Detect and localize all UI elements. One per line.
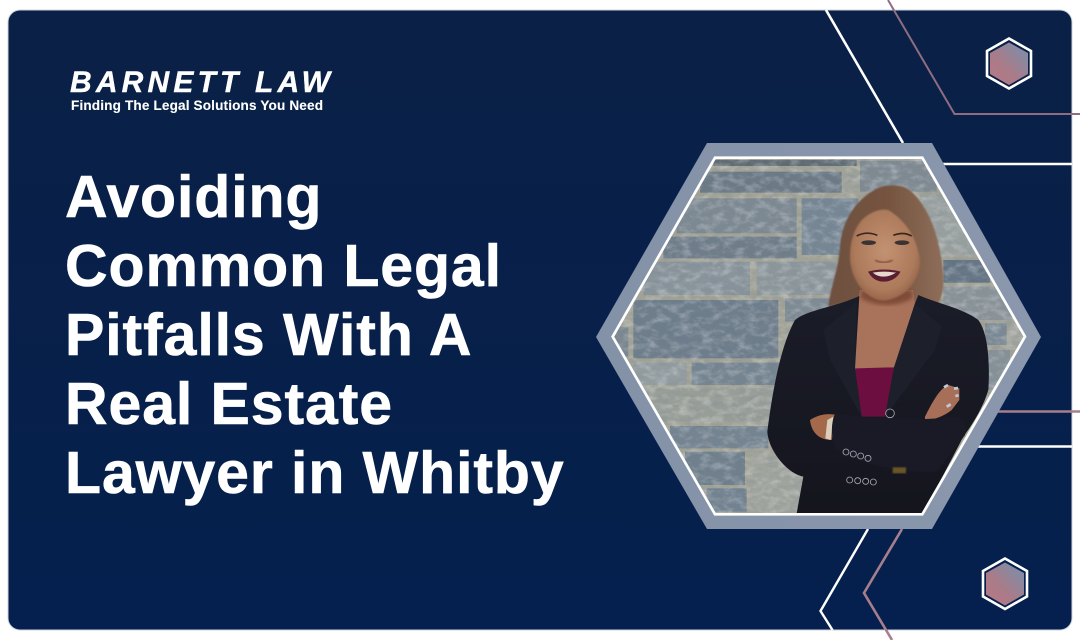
jacket buttons	[843, 409, 894, 485]
decorative line: bottom mauve connector	[864, 529, 902, 640]
icon: bottom hexagon	[983, 558, 1027, 609]
decorative line: top white diagonal	[826, 10, 903, 143]
neck and chest	[855, 290, 915, 368]
lapels	[850, 304, 915, 416]
smile	[868, 269, 901, 282]
decorative line: top mauve connector	[888, 0, 1080, 114]
stone wall	[610, 157, 1030, 517]
title: Pitfalls With A	[65, 302, 471, 368]
magenta top	[855, 367, 894, 420]
title: Lawyer in Whitby	[65, 440, 565, 506]
logo tagline: Finding The Legal Solutions You Need	[71, 98, 323, 113]
title: Avoiding	[65, 164, 322, 230]
decorative line: lower white horizontal	[977, 445, 1072, 448]
watch	[825, 417, 833, 440]
left forearm	[810, 414, 837, 440]
title: Common Legal	[65, 233, 502, 299]
crossed sleeve	[832, 414, 966, 439]
portrait white outline	[613, 158, 1025, 514]
decorative line: mauve right horizontal	[998, 410, 1080, 413]
icon: top hexagon	[987, 38, 1031, 88]
face	[850, 210, 920, 301]
neck shadow	[861, 290, 913, 305]
eyes and brows	[857, 233, 912, 245]
decorative line: bottom white connector	[820, 529, 868, 630]
decorative line: upper white horizontal	[943, 163, 1072, 165]
hair	[828, 185, 943, 307]
logo	[70, 66, 333, 113]
jacket	[767, 295, 989, 513]
nails	[944, 385, 959, 407]
title: Real Estate	[65, 371, 393, 437]
hand on arm	[925, 385, 959, 420]
logo wordmark: BARNETT LAW	[70, 66, 333, 99]
nose shadow	[875, 260, 893, 262]
portrait photo	[610, 157, 1030, 517]
hexagon portrait frame	[596, 143, 1041, 529]
bracelet glint	[893, 467, 906, 473]
